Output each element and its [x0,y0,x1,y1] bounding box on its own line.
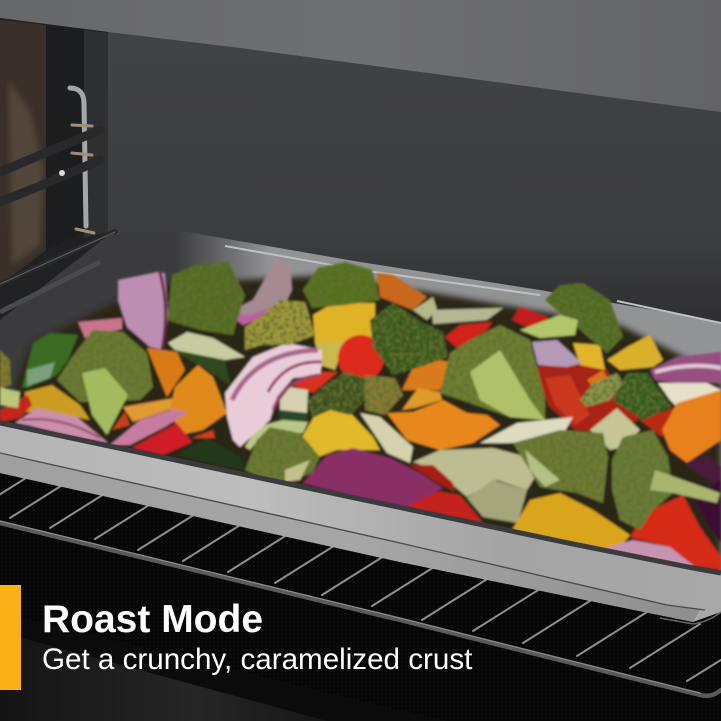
broccoli florets [0,262,673,530]
onion back pieces [227,258,721,410]
accent bar [0,585,21,690]
broccoli stalks [0,315,720,503]
dark pan shadow under vegetables [0,275,721,580]
zucchini slices [168,332,640,523]
onions [15,272,721,567]
back wall [0,0,721,340]
oven ceiling [0,0,721,112]
left side wall and door [0,18,108,320]
heading: Roast Mode [42,598,263,641]
baking pan interior [0,232,721,580]
oven floor [0,470,721,721]
red and yellow mid background [293,335,677,437]
baking pan front lip [0,423,721,624]
back row pieces [22,273,550,388]
oven rack [0,466,721,696]
peppers [0,303,721,570]
rack hanger on left wall [0,88,150,284]
subheading: Get a crunchy, caramelized crust [42,643,472,676]
roasted vegetables [0,258,721,580]
caption [42,598,472,676]
